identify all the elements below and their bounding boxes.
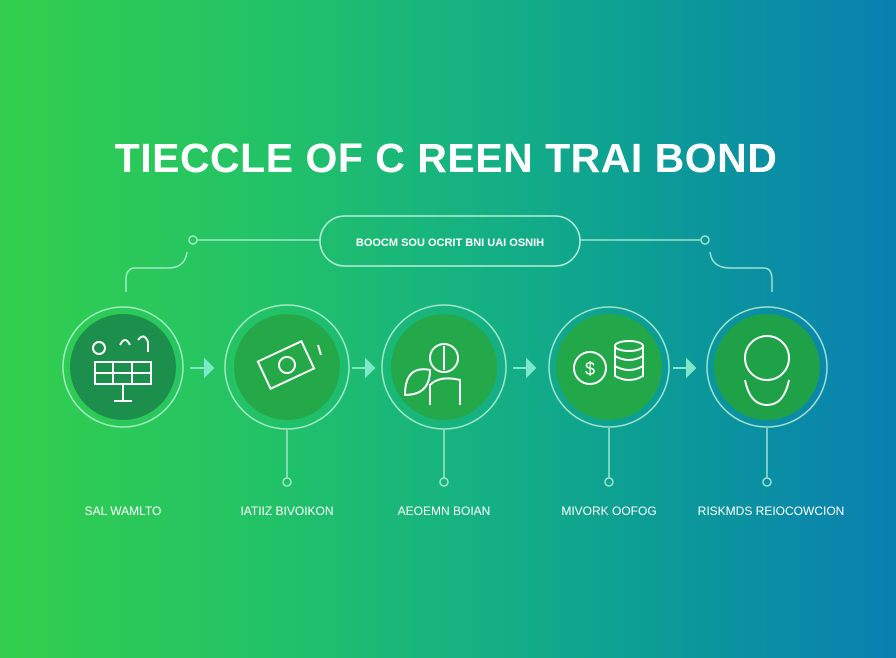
labels: RISKMDS REIOCOWCION <box>698 504 844 518</box>
icons: $ <box>585 359 595 379</box>
labels: MIVORK OOFOG <box>561 504 657 518</box>
icons <box>93 336 789 405</box>
labels <box>85 504 844 518</box>
pill header: BOOCM SOU OCRIT BNI UAI OSNIH <box>356 237 544 249</box>
labels: IATIIZ BIVOIKON <box>240 504 334 518</box>
pill header <box>320 216 580 266</box>
labels: SAL WAMLTO <box>85 504 161 518</box>
connector lines top <box>126 236 772 292</box>
title: TIECCLE OF C REEN TRAI BOND <box>115 135 777 181</box>
steps <box>63 305 844 518</box>
arrows <box>190 360 695 376</box>
labels: AEOEMN BOIAN <box>398 504 490 518</box>
